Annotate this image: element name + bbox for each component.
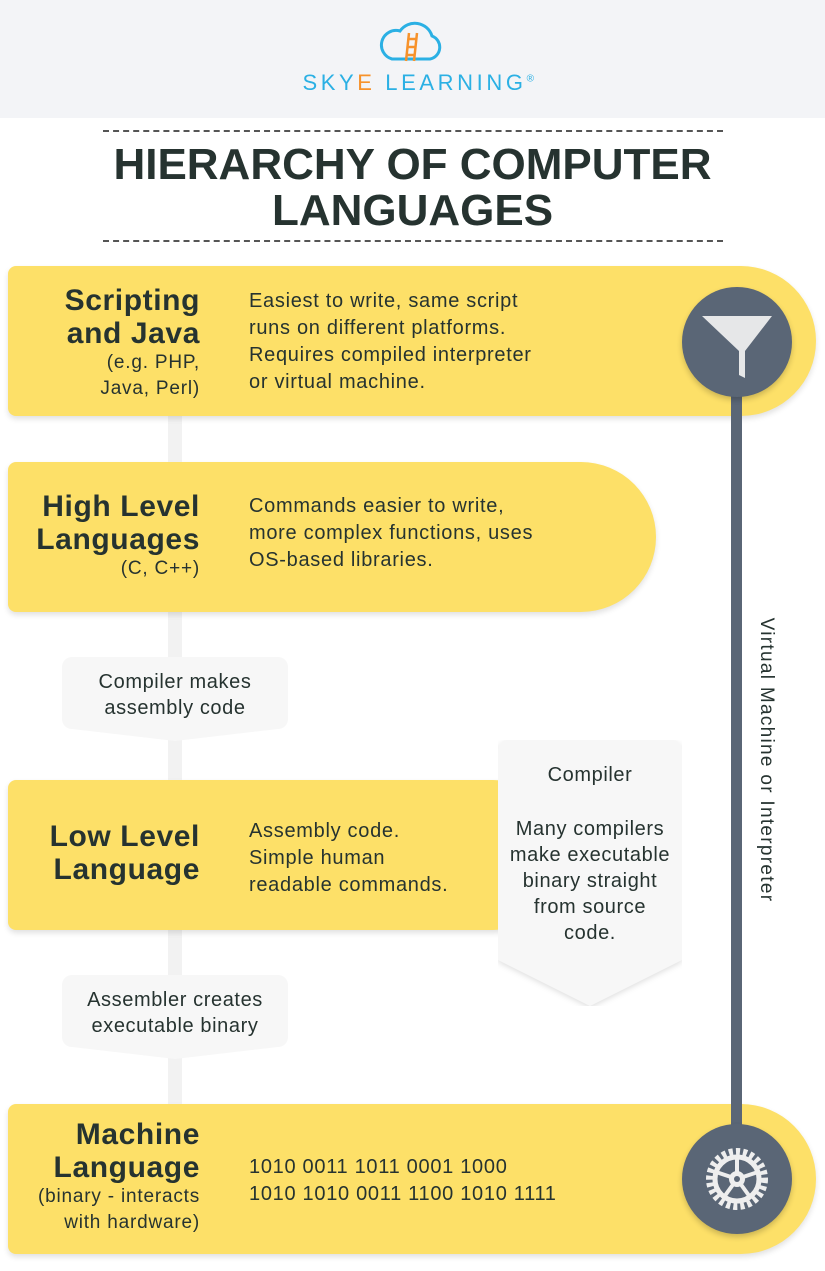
callout: compiler: Compiler xyxy=(548,764,632,786)
description: high level: Commands easier to write, xyxy=(249,495,504,517)
title: LANGUAGES xyxy=(272,186,553,235)
heading: high level xyxy=(36,490,200,579)
callout: compiler: from source xyxy=(534,896,646,918)
heading: high level: Languages xyxy=(36,523,200,556)
heading: low level xyxy=(50,820,200,886)
callout: assembler xyxy=(87,989,263,1037)
description: low level: readable commands. xyxy=(249,874,448,896)
heading: low level: Low Level xyxy=(50,820,200,853)
callout: compiler: make executable xyxy=(510,844,670,866)
icon: gear xyxy=(682,1124,792,1234)
heading: machine: Machine xyxy=(76,1118,200,1151)
brand name: SKYE LEARNING® xyxy=(302,70,538,95)
vertical label: Virtual Machine or Interpreter xyxy=(756,618,777,902)
heading: high level: (C, C++) xyxy=(121,558,200,579)
callout: assembler: executable binary xyxy=(92,1015,258,1037)
description: scripting: or virtual machine. xyxy=(249,371,426,393)
callout: assembler: Assembler creates xyxy=(87,989,263,1011)
description: scripting: Easiest to write, same script xyxy=(249,290,518,312)
callout: compiler: binary straight xyxy=(523,870,657,892)
heading: scripting: (e.g. PHP, xyxy=(107,352,200,373)
heading: scripting xyxy=(65,284,200,399)
left connector line xyxy=(168,416,182,1106)
icon: cloud with ladder xyxy=(380,22,442,62)
title: HIERARCHY OF COMPUTER xyxy=(113,140,712,189)
description: high level: OS-based libraries. xyxy=(249,549,433,571)
heading: low level: Language xyxy=(54,853,200,886)
description: high level: more complex functions, uses xyxy=(249,522,533,544)
description: high level xyxy=(249,495,533,571)
logo xyxy=(302,22,538,95)
callout: compiler: code. xyxy=(564,922,616,944)
callout: compiler: Many compilers xyxy=(516,818,664,840)
heading: scripting: Scripting xyxy=(65,284,200,317)
description: scripting: runs on different platforms. xyxy=(249,317,506,339)
heading: high level: High Level xyxy=(42,490,200,523)
icon: funnel xyxy=(682,287,792,397)
card: machine language xyxy=(8,1104,816,1254)
heading: machine: Language xyxy=(54,1151,200,1184)
description: machine: 1010 0011 1011 0001 1000 xyxy=(249,1156,508,1178)
callout: compiler makes assembly: Compiler makes xyxy=(99,671,251,693)
callout: compiler makes assembly xyxy=(99,671,251,719)
description: low level xyxy=(249,820,448,896)
card: high level xyxy=(8,462,656,612)
heading: machine: (binary - interacts xyxy=(38,1186,200,1207)
description: machine xyxy=(249,1156,557,1205)
title xyxy=(113,140,712,235)
card: scripting xyxy=(8,266,816,416)
card: low level xyxy=(8,780,568,930)
heading: scripting: Java, Perl) xyxy=(100,378,200,399)
heading: machine xyxy=(38,1118,200,1233)
heading: scripting: and Java xyxy=(67,317,200,350)
vertical connector line xyxy=(731,380,742,1140)
description: scripting xyxy=(249,290,532,393)
description: low level: Assembly code. xyxy=(249,820,400,842)
heading: machine: with hardware) xyxy=(64,1212,200,1233)
callout: compiler makes assembly: assembly code xyxy=(104,697,246,719)
description: machine: 1010 1010 0011 1100 1010 1111 xyxy=(249,1183,557,1205)
description: low level: Simple human xyxy=(249,847,385,869)
description: scripting: Requires compiled interpreter xyxy=(249,344,532,366)
header band xyxy=(0,0,825,118)
callout: compiler xyxy=(498,746,682,1006)
